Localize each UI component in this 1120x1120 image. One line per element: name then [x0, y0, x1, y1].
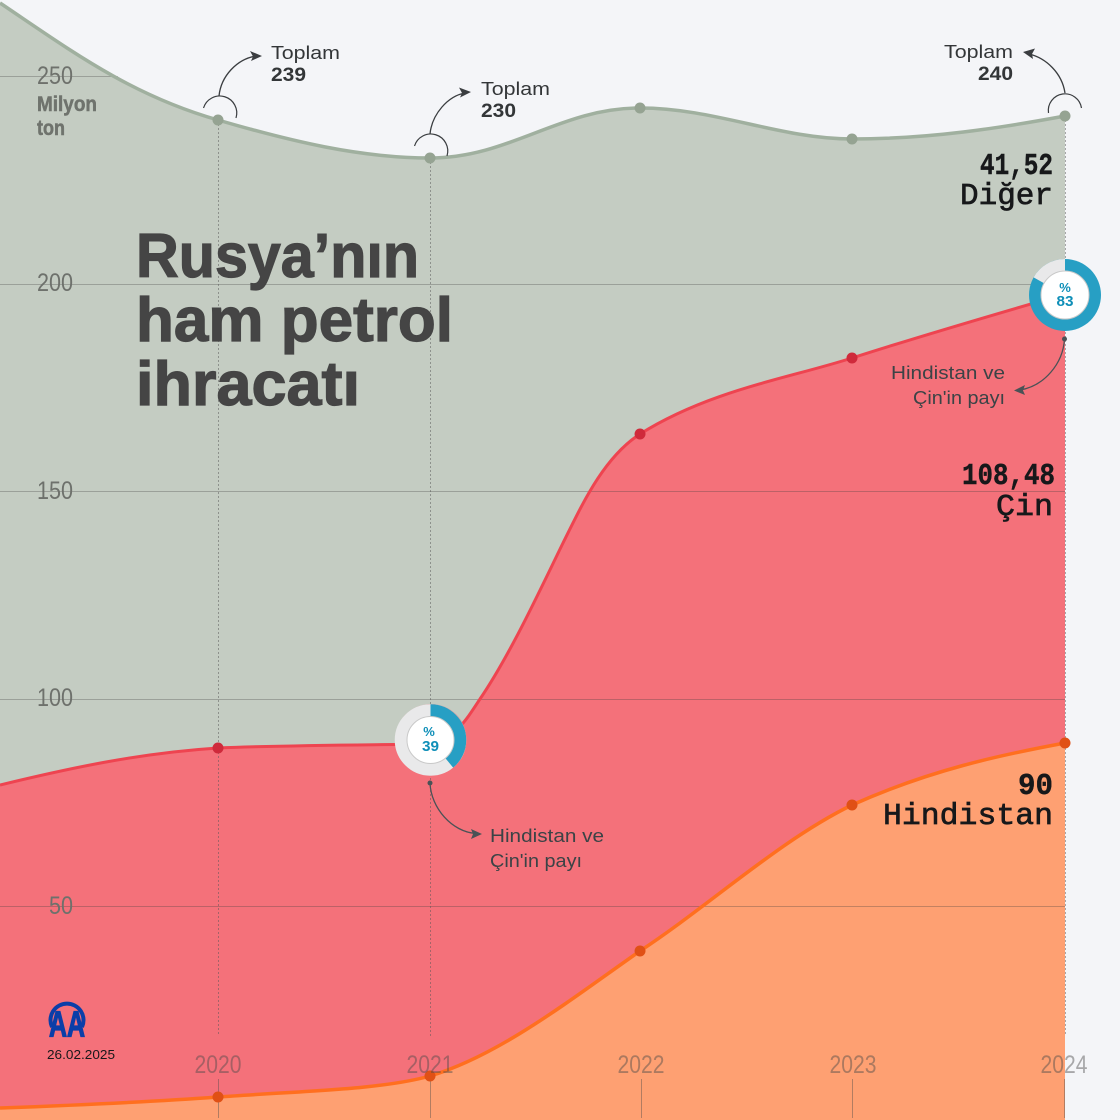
x axis years: 2023 — [830, 1051, 876, 1079]
logo: AA: AA — [49, 1004, 85, 1044]
unit label: ton — [37, 117, 65, 140]
data points: Hindistan — [212, 738, 1070, 1102]
title — [136, 222, 453, 419]
callout: total 2020: 239 — [271, 65, 306, 86]
callout: total 2020 — [204, 42, 340, 118]
callout: share note 2024: Çin'in payı — [913, 388, 1005, 408]
callout: total 2021 — [414, 78, 550, 156]
y axis labels: 200 — [37, 269, 73, 297]
y axis labels: 50 — [49, 892, 73, 920]
x axis years: 2020 — [194, 1051, 242, 1079]
series label: Çin: 108,48 — [962, 459, 1055, 494]
x axis years: 2021 — [406, 1051, 454, 1079]
donut: 2024 share 83%: % — [1059, 280, 1071, 295]
line: Çin — [0, 294, 1065, 785]
x axis years: 2024 — [1040, 1051, 1088, 1079]
callout: total 2021: Toplam — [481, 78, 550, 99]
callout: share note 2021 — [428, 780, 604, 871]
callout: total 2024: 240 — [978, 64, 1013, 85]
title: Rusya’nın — [136, 222, 419, 291]
series label: Çin — [962, 459, 1055, 525]
series label: Diğer — [960, 149, 1053, 214]
y axis labels: 150 — [37, 477, 73, 505]
y axis labels: 250 — [37, 62, 73, 90]
y axis labels: 100 — [37, 684, 73, 712]
callout: total 2024 — [944, 41, 1082, 113]
callout: total 2021: 230 — [481, 101, 516, 122]
series label: Diğer: Diğer — [960, 179, 1053, 214]
data points: Çin — [212, 352, 858, 754]
series label: Çin: Çin — [996, 490, 1053, 525]
line: Hindistan — [0, 743, 1065, 1108]
area: Hindistan — [0, 743, 1065, 1120]
line: Toplam — [0, 3, 1065, 158]
callout: total 2024: Toplam — [944, 41, 1013, 62]
series label: Hindistan — [883, 769, 1053, 834]
title: ham petrol — [136, 286, 453, 355]
callout: share note 2024 — [891, 336, 1067, 408]
series label: Hindistan: 90 — [1018, 769, 1053, 804]
x axis years: 2022 — [618, 1051, 664, 1079]
callout: total 2020: Toplam — [271, 42, 340, 63]
donut: 2021 share 39% — [395, 704, 467, 776]
series label: Diğer: 41,52 — [980, 149, 1053, 184]
callout: share note 2024: Hindistan ve — [891, 363, 1005, 383]
donut: 2021 share 39%: % — [423, 724, 435, 739]
series label: Hindistan: Hindistan — [883, 799, 1053, 834]
data points: Toplam — [212, 102, 1070, 164]
y axis labels — [37, 62, 73, 920]
title: ihracatı — [136, 350, 360, 419]
area: Çin — [0, 294, 1065, 1120]
donut: 2024 share 83%: 83 — [1056, 293, 1074, 310]
donut: 2024 share 83% — [1029, 259, 1101, 331]
x axis years — [194, 1051, 1088, 1079]
logo: AA — [49, 1004, 85, 1044]
date: 26.02.2025 — [47, 1048, 115, 1062]
donut: 2021 share 39%: 39 — [422, 738, 439, 755]
unit label — [37, 93, 97, 140]
callout: share note 2021: Çin'in payı — [490, 851, 582, 871]
unit label: Milyon — [37, 93, 97, 116]
callout: share note 2021: Hindistan ve — [490, 826, 604, 846]
